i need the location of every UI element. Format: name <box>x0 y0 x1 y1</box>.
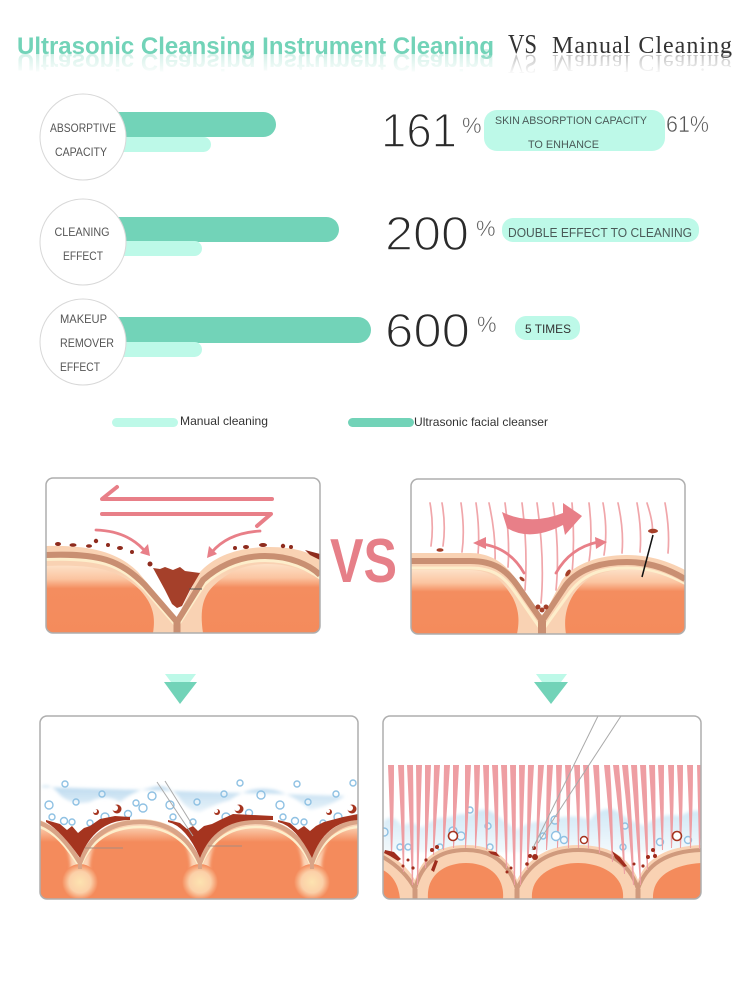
foam cloud <box>40 786 345 812</box>
arrow: particle lifted left <box>473 537 524 573</box>
value: 161 percent: 161 <box>381 105 457 158</box>
ultrasonic waves <box>430 503 669 603</box>
bar: ultrasonic absorptive <box>100 112 276 137</box>
bar: manual absorptive <box>100 137 211 152</box>
ultrasonic waves <box>388 765 703 885</box>
foam cloud <box>383 809 701 852</box>
comparison row: cleaning effect <box>40 199 699 285</box>
comparison row: absorptive capacity <box>40 94 709 180</box>
bar: ultrasonic cleaning <box>100 217 339 242</box>
callout: skin absorption: SKIN ABSORPTION CAPACITY <box>495 115 648 127</box>
dirt flakes in bubbles <box>93 804 356 815</box>
dirt particles <box>384 845 657 874</box>
callout: 5 times: 5 TIMES <box>525 322 571 336</box>
panel: manual cleaning pore diagram <box>46 478 320 633</box>
circle label: absorptive capacity: ABSORPTIVE <box>50 123 116 135</box>
title: manual cleaning: Manual Cleaning <box>552 33 732 59</box>
arrow: curved into pore right <box>207 531 260 558</box>
comparison row: makeup remover effect <box>40 299 580 385</box>
value: 200 percent: 200 <box>385 208 469 261</box>
circle label: makeup remover effect: EFFECT <box>60 362 100 374</box>
panel: ultrasonic cleaning result <box>380 716 703 899</box>
title <box>0 29 750 79</box>
circle label: makeup remover effect <box>40 299 126 385</box>
legend <box>112 414 548 429</box>
panel: ultrasonic pore diagram <box>411 479 685 634</box>
VS label: VS <box>330 527 397 596</box>
title: VS: VS <box>508 29 537 59</box>
needle mark <box>642 535 653 577</box>
callout: double effect: DOUBLE EFFECT TO CLEANING <box>508 226 692 240</box>
arrow: big sweep right <box>502 503 582 535</box>
foam bubbles <box>45 780 356 826</box>
skin lines <box>85 846 242 848</box>
arrow: curved into pore left <box>96 530 150 556</box>
callout: 5 times <box>515 316 580 340</box>
legend: ultrasonic facial cleanser: Ultrasonic facial cleanser <box>414 415 548 429</box>
bubble highlights <box>93 805 353 813</box>
dirt in pore <box>153 567 200 608</box>
arrow: particle lifted right <box>556 537 607 573</box>
callout: skin absorption <box>484 110 665 151</box>
bar: manual cleaning <box>100 241 202 256</box>
callout: skin absorption: TO ENHANCE <box>528 139 599 151</box>
circle label: cleaning effect: EFFECT <box>63 251 103 263</box>
title reflection: Manual Cleaning <box>552 49 732 75</box>
skin layers <box>40 819 358 899</box>
legend: ultrasonic facial cleanser <box>348 415 548 429</box>
skin layers <box>46 546 320 633</box>
arrow: scrub left <box>102 487 272 499</box>
circle label: cleaning effect: CLEANING <box>54 227 110 239</box>
title: ultrasonic cleansing instrument cleaning: Ultrasonic Cleansing Instrument Cleaning <box>17 33 494 60</box>
skin layers <box>411 553 685 634</box>
circle label: makeup remover effect: MAKEUP <box>60 314 107 326</box>
arrow: down left <box>164 674 197 704</box>
value: 61 percent: 61% <box>666 111 709 137</box>
skin line mark <box>189 588 202 590</box>
follicle bulbs <box>62 863 330 900</box>
dirt particles <box>436 529 658 612</box>
legend: manual cleaning <box>112 414 268 428</box>
skin layers <box>383 845 701 899</box>
value: 161 percent: % <box>462 113 482 138</box>
title reflection: VS <box>508 49 537 79</box>
bar: ultrasonic makeup remover <box>100 317 371 343</box>
panel: manual cleaning result <box>40 716 358 900</box>
title reflection <box>17 48 732 79</box>
title reflection: Ultrasonic Cleansing Instrument Cleaning <box>17 48 494 75</box>
circle label: cleaning effect <box>40 199 126 285</box>
circle label: makeup remover effect: REMOVER <box>60 338 114 350</box>
bar: manual makeup remover <box>100 342 202 357</box>
legend: manual cleaning: Manual cleaning <box>180 414 268 428</box>
circle label: absorptive capacity: CAPACITY <box>55 147 107 159</box>
marker lines <box>532 716 621 850</box>
ringed particles <box>448 832 682 844</box>
bubbles <box>380 807 692 850</box>
arrow: scrub right <box>102 514 271 526</box>
value: 600 percent: % <box>477 312 497 337</box>
value: 200 percent: % <box>476 216 496 241</box>
callout: double effect <box>502 218 699 242</box>
marker lines <box>157 781 193 836</box>
arrow: down right <box>534 674 568 704</box>
dirt particles <box>55 539 320 566</box>
dirt in pores <box>46 814 358 858</box>
circle label: absorptive capacity <box>40 94 126 180</box>
value: 600 percent: 600 <box>385 305 470 358</box>
